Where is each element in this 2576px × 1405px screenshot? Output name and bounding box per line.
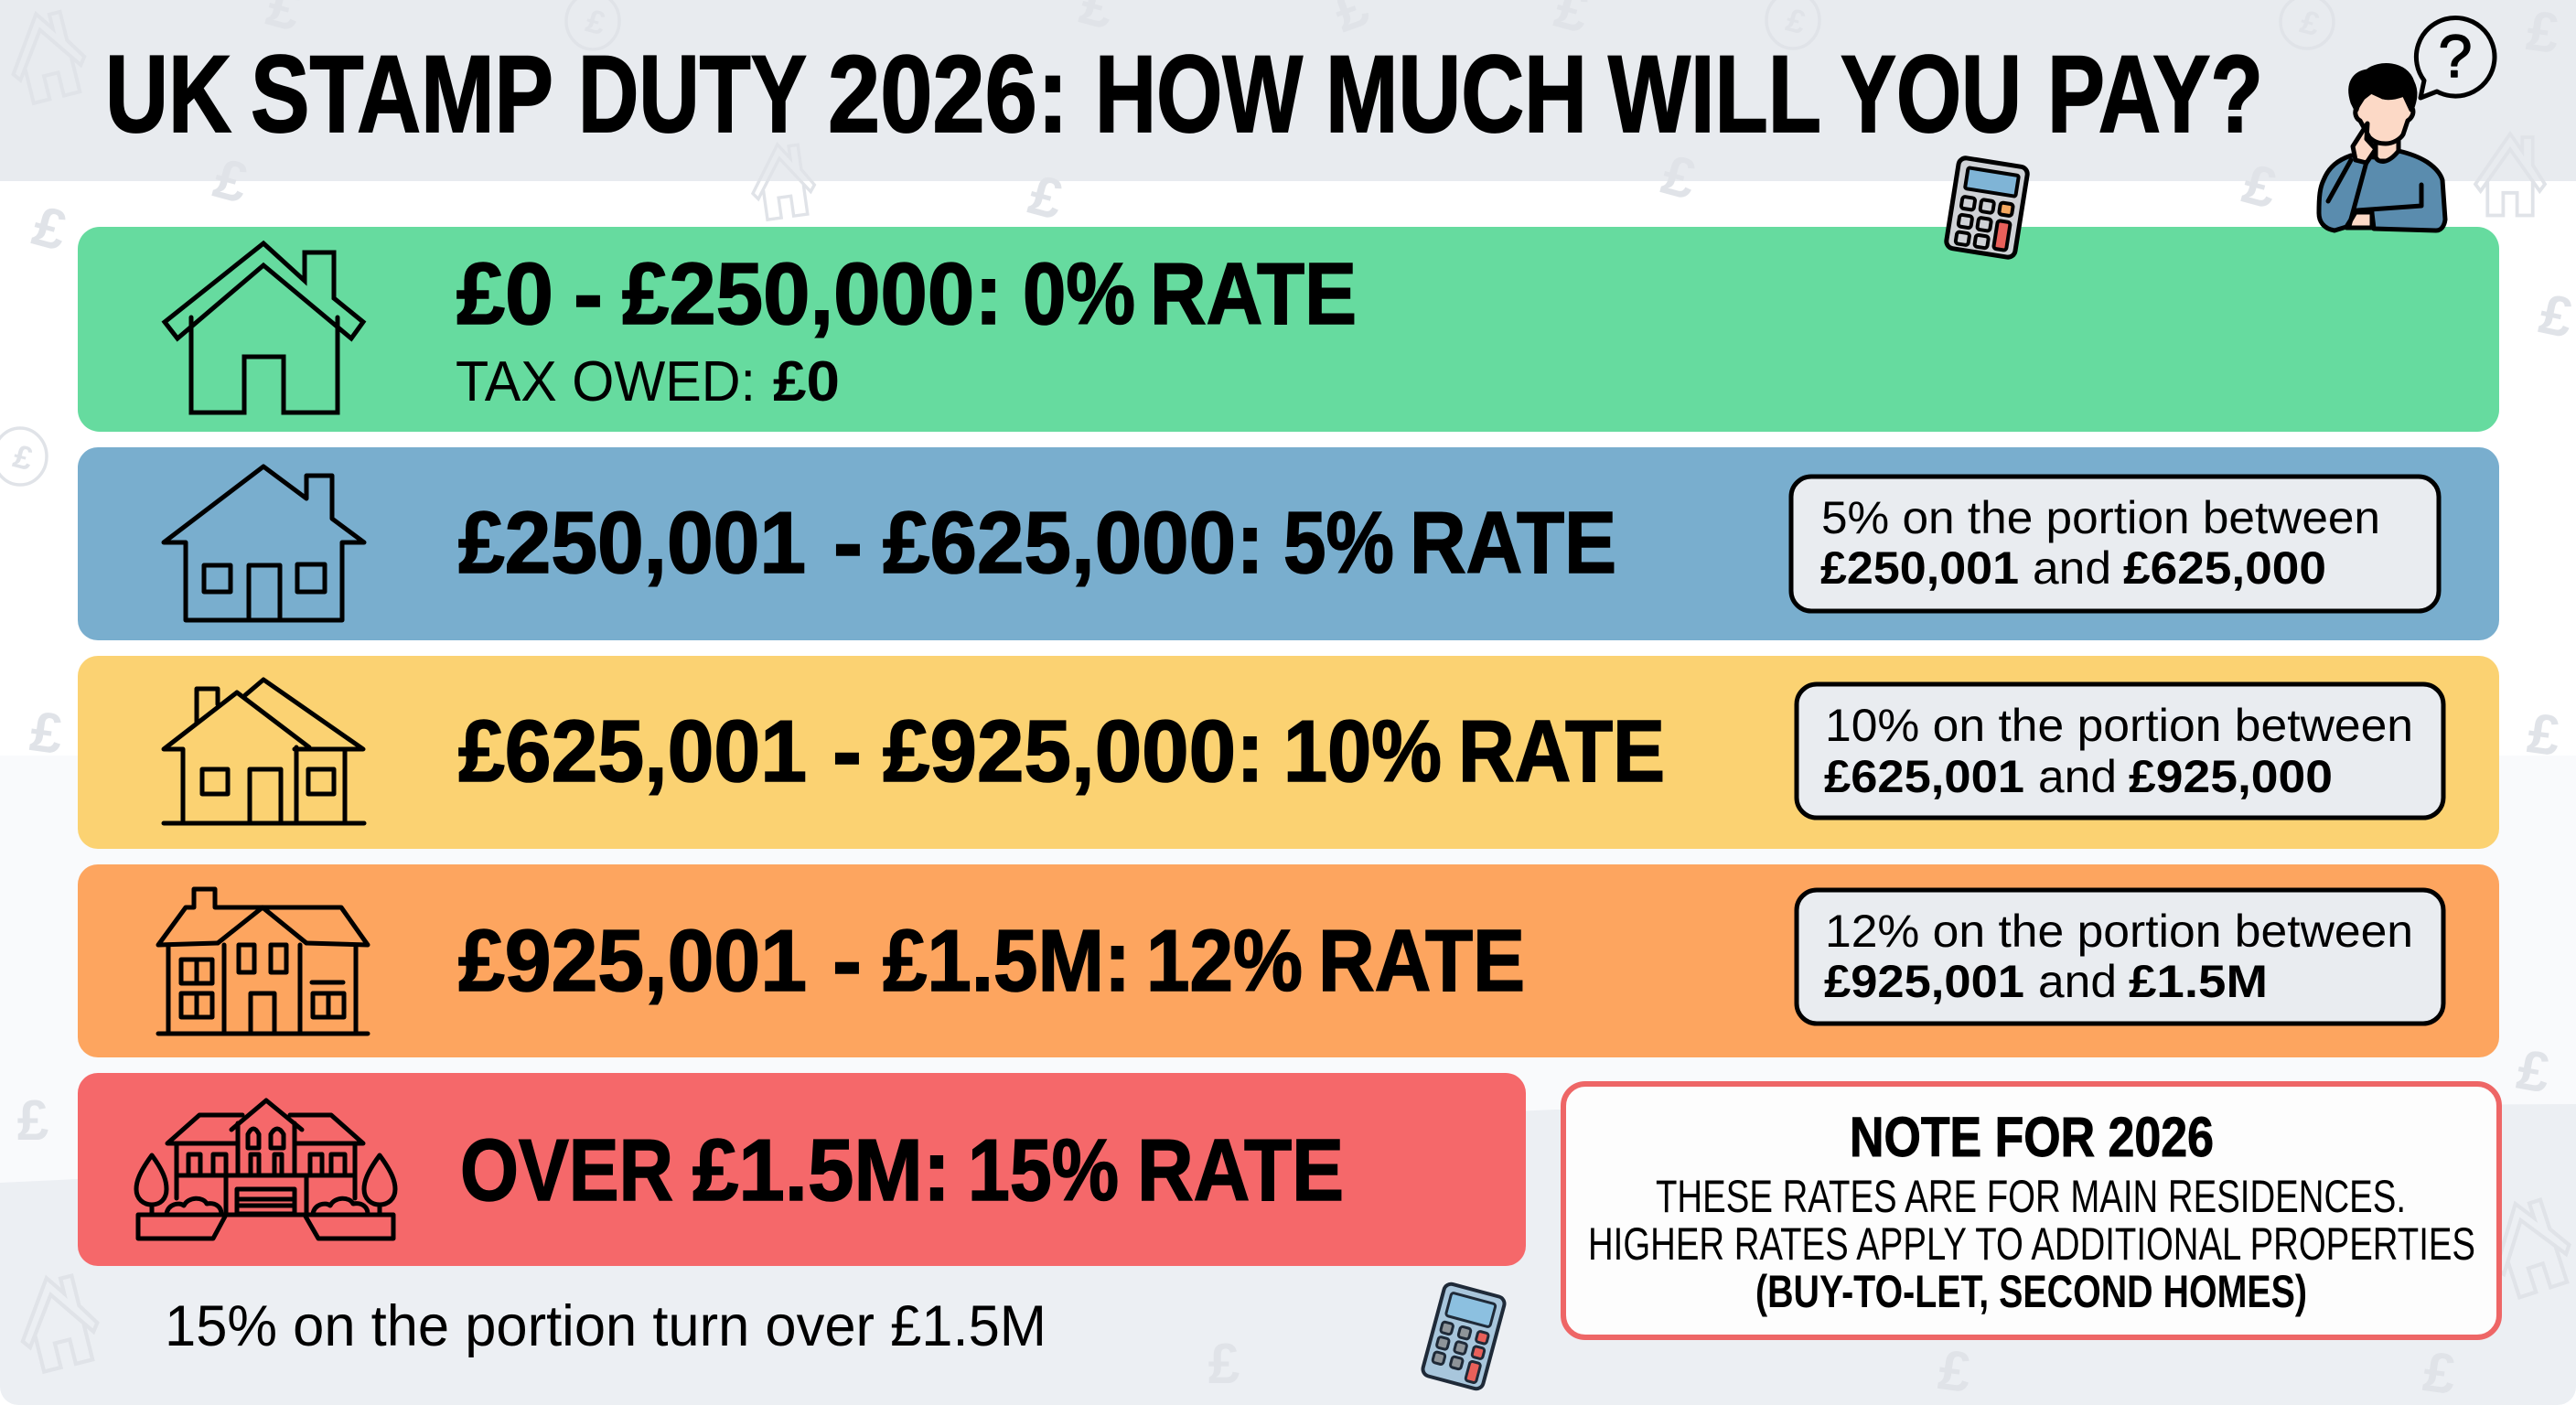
heading: tier 4 [458, 912, 1525, 1010]
heading: tier 5: 15% [968, 1121, 1119, 1219]
heading: tier 1: 0% [1023, 245, 1135, 343]
text: £ [27, 700, 67, 767]
heading: tier 1: £250,000: [622, 245, 1003, 343]
title: UK [105, 33, 231, 156]
text: £ [2524, 702, 2564, 768]
callout: tier 3: and [2038, 751, 2117, 802]
title: STAMP [251, 33, 553, 156]
heading: tier 1 [456, 245, 1357, 343]
heading: tier 4: £925,001 [458, 912, 807, 1010]
callout: tier 4: 12% on the portion between [1825, 906, 2413, 957]
tax owed text: TAX OWED: [456, 350, 756, 413]
heading: tier 2 [458, 494, 1616, 592]
heading: tier 1: £0 [456, 245, 553, 343]
text: £ [1656, 143, 1702, 212]
title: DUTY [578, 33, 807, 156]
text: £ [2523, 0, 2563, 66]
tier 4: orange row [78, 864, 2499, 1057]
title: YOU [1841, 33, 2022, 156]
icon: small house [165, 243, 363, 413]
heading: tier 1: RATE [1150, 245, 1357, 343]
callout: tier 2 [1791, 477, 2439, 611]
callout: tier 3: 10% on the portion between [1825, 700, 2413, 751]
speech bubble [2416, 17, 2495, 98]
tier 5 description text: 15% on the portion turn over £1.5M [165, 1294, 1046, 1358]
icon: calculator bottom [1422, 1282, 1506, 1390]
heading: tier 4: 12% [1146, 912, 1303, 1010]
heading: tier 4: RATE [1318, 912, 1525, 1010]
heading: tier 4: £1.5M: [883, 912, 1131, 1010]
text: £ [2296, 3, 2324, 43]
tier 5: red row [78, 1073, 1526, 1266]
text: £ [9, 437, 37, 477]
heading: tier 3: RATE [1458, 702, 1665, 800]
note box [1563, 1084, 2499, 1337]
callout: tier 3: £625,001 [1824, 751, 2024, 802]
heading: tier 3: - [832, 702, 862, 800]
heading: tier 2: - [833, 494, 863, 592]
callout: tier 4: £1.5M [2129, 956, 2268, 1007]
heading: tier 1: - [574, 245, 603, 343]
icon: larger house [164, 680, 364, 823]
icon: detached house [164, 467, 364, 620]
heading: tier 2: RATE [1410, 494, 1616, 592]
text: £ [1782, 1, 1809, 41]
title: PAY? [2047, 33, 2263, 156]
text: £ [1208, 1333, 1240, 1396]
tier 3: yellow row [78, 656, 2499, 849]
heading: tier 5 [460, 1121, 1344, 1219]
title: WILL [1608, 33, 1821, 156]
tier 2: blue row [78, 447, 2499, 640]
note heading: NOTE FOR 2026 [1850, 1106, 2214, 1168]
heading: tier 3: £925,000: [883, 702, 1264, 800]
heading: tier 4: - [832, 912, 862, 1010]
heading: tier 5: OVER [460, 1121, 673, 1219]
text: £ [1935, 1338, 1975, 1405]
callout: tier 2: £625,000 [2123, 542, 2326, 594]
text: £ [2237, 152, 2283, 221]
icon: large house [158, 889, 368, 1034]
heading: tier 2: 5% [1283, 494, 1394, 592]
title: HOW [1095, 33, 1304, 156]
title [105, 33, 2263, 156]
heading: tier 2: £625,000: [883, 494, 1264, 592]
heading: tier 3: £625,001 [458, 702, 807, 800]
heading: tier 5: £1.5M: [692, 1121, 950, 1219]
callout: tier 4: £925,001 [1824, 956, 2024, 1007]
text: £ [208, 146, 254, 216]
heading: tier 5: RATE [1137, 1121, 1344, 1219]
speech bubble: ? [2439, 22, 2472, 90]
title: MUCH [1326, 33, 1587, 156]
tax owed text: £0 [773, 350, 840, 413]
title: 2026: [828, 33, 1068, 156]
text: £ [27, 194, 73, 263]
callout: tier 2: 5% on the portion between [1821, 492, 2380, 543]
callout: tier 4 [1797, 890, 2443, 1024]
text: £ [582, 2, 609, 42]
text: £ [17, 1089, 48, 1153]
callout: tier 3: £925,000 [2129, 751, 2333, 802]
icon: calculator top [1946, 157, 2028, 258]
callout: tier 3 [1797, 684, 2443, 818]
note body [1588, 1171, 2475, 1317]
heading: tier 3 [458, 702, 1665, 800]
callout: tier 2: £250,001 [1820, 542, 2019, 594]
callout: tier 4: and [2038, 956, 2117, 1007]
icon: mansion [136, 1100, 395, 1239]
icon: thinking person [2319, 17, 2495, 231]
callout: tier 2: and [2033, 542, 2111, 594]
text: £ [2513, 1038, 2555, 1106]
text: £ [1023, 163, 1069, 232]
heading: tier 3: 10% [1283, 702, 1442, 800]
note body: (BUY-TO-LET, SECOND HOMES) [1755, 1266, 2307, 1317]
heading: tier 2: £250,001 [458, 494, 806, 592]
tier 1: green row [78, 227, 2499, 432]
